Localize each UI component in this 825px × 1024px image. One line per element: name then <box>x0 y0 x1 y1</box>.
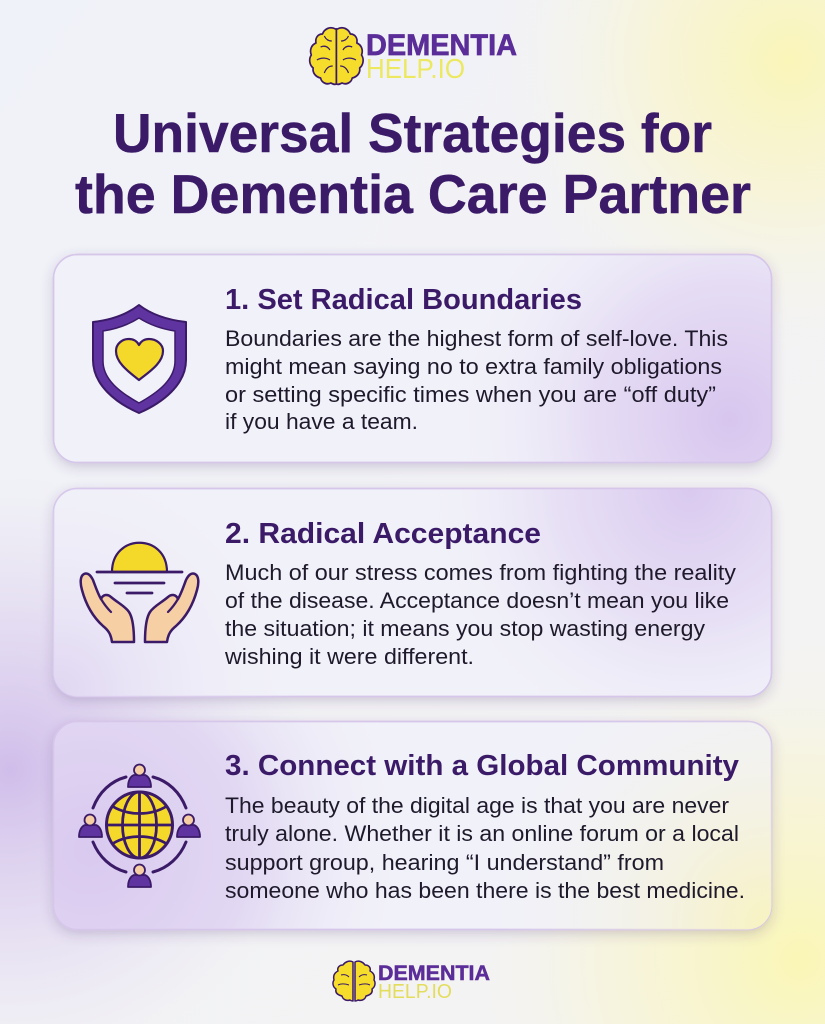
body text <box>224 560 737 669</box>
body text: support group, hearing “I understand” from <box>225 850 664 875</box>
title: the Dementia Care Partner <box>75 163 751 225</box>
body text: Much of our stress comes from fighting the reality <box>225 560 737 585</box>
wordmark: dementia: DEMENTIA <box>378 962 490 985</box>
icon: brain small <box>333 961 375 1001</box>
body text: might mean saying no to extra family obligations <box>225 354 722 379</box>
body text: if you have a team. <box>225 409 418 434</box>
body text: someone who has been there is the best medicine. <box>225 878 745 903</box>
body text: wishing it were different. <box>224 644 474 669</box>
title: Universal Strategies for <box>113 102 712 164</box>
body text: The beauty of the digital age is that you are never <box>225 793 730 818</box>
icon: globe with people <box>79 764 200 887</box>
heading: 2. Radical Acceptance <box>225 518 541 550</box>
icons: people <box>79 764 200 887</box>
logo: top <box>310 28 517 84</box>
body text <box>225 326 728 434</box>
body text <box>225 793 745 903</box>
panel: set radical boundaries <box>54 254 772 462</box>
title <box>75 102 751 225</box>
body text: of the disease. Acceptance doesn’t mean you like <box>225 588 729 613</box>
body text: the situation; it means you stop wasting energy <box>225 616 706 641</box>
body text: or setting specific times when you are “off duty” <box>225 382 716 407</box>
wordmark: help.io: HELP.IO <box>366 53 465 84</box>
body text: Boundaries are the highest form of self-love. This <box>225 326 728 351</box>
logo: bottom <box>333 961 490 1003</box>
icon: shield with heart <box>93 305 186 413</box>
icon: brain <box>310 28 363 84</box>
panel: radical acceptance <box>54 488 772 696</box>
wordmark: dementia: DEMENTIA <box>366 29 517 62</box>
icon: hands holding sun <box>81 543 198 642</box>
wordmark: help.io: HELP.IO <box>378 981 452 1003</box>
panel: connect with a global community <box>54 722 772 930</box>
heading: 3. Connect with a Global Community <box>225 750 739 782</box>
heading: 1. Set Radical Boundaries <box>225 284 582 316</box>
body text: truly alone. Whether it is an online forum or a local <box>225 821 739 846</box>
